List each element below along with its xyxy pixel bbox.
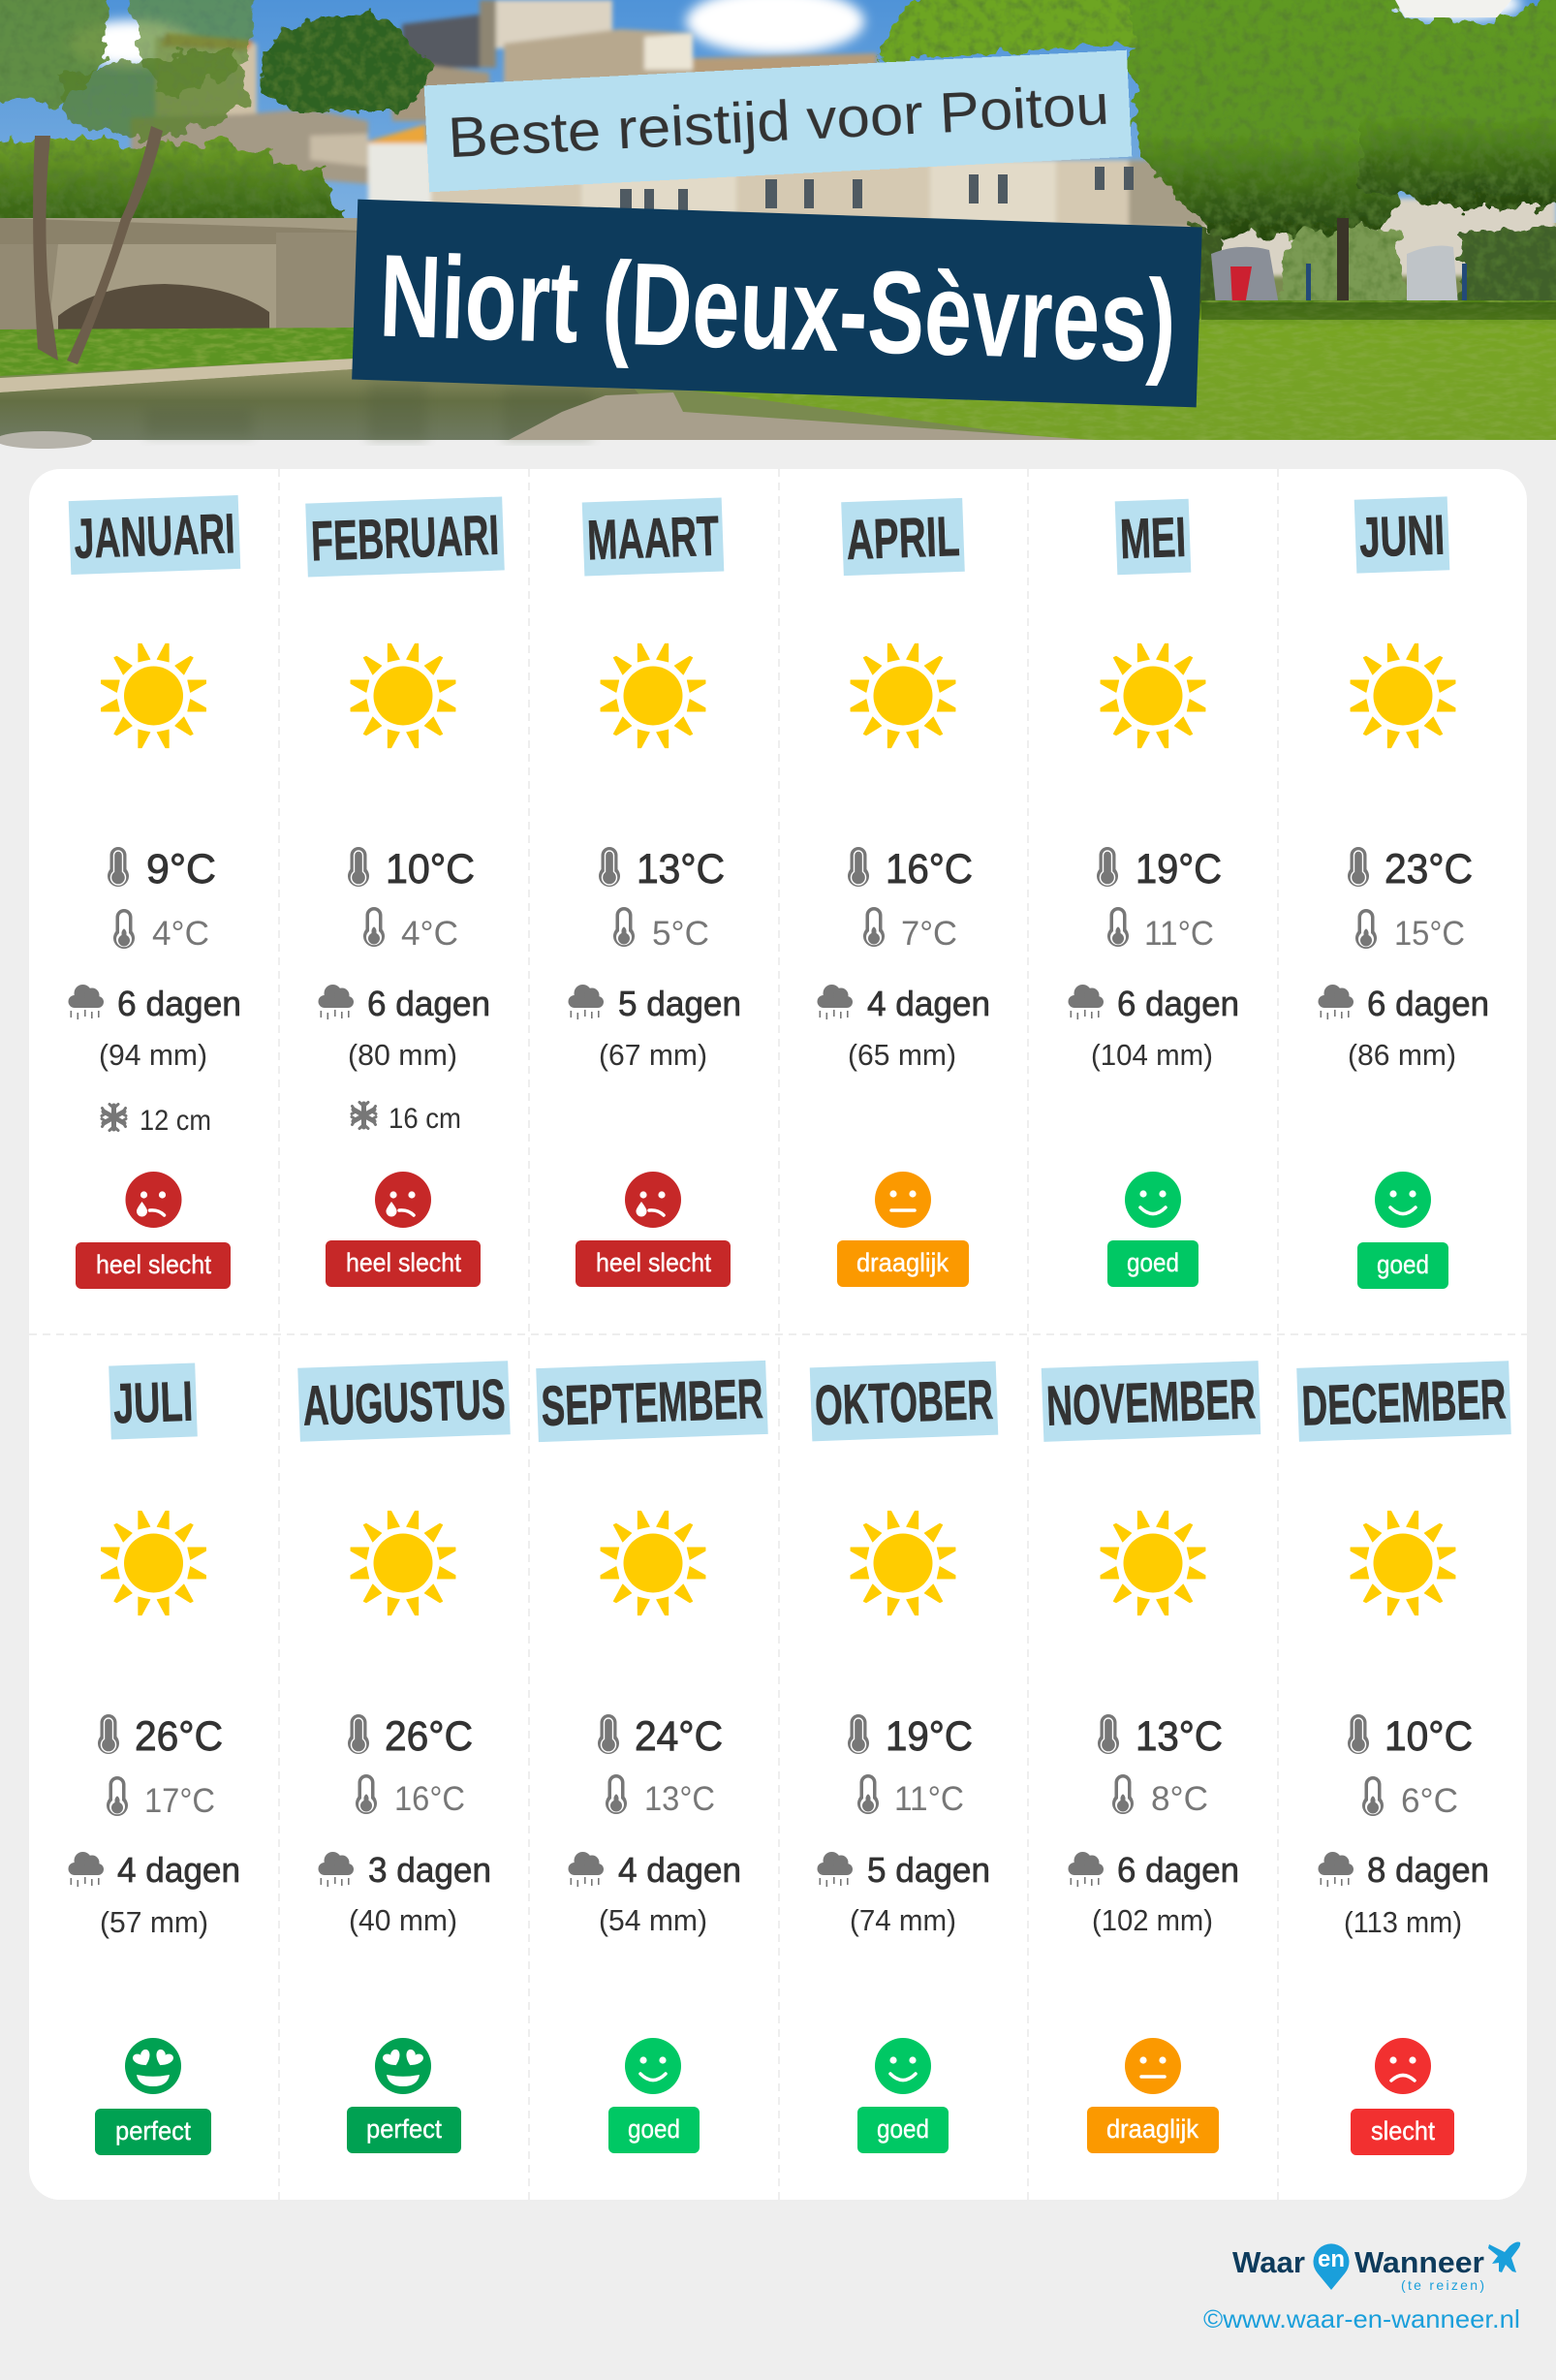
icon: thermometer low [613,907,635,947]
rating badge: draaglijk [1106,2114,1198,2144]
max temperature: 26°C [135,1713,223,1760]
rainfall: (65 mm) [848,1038,956,1072]
icon: sun [601,1511,705,1615]
header photo: Niort riverside [0,0,1556,449]
icon: thermometer high [1348,1714,1369,1754]
panel: oktober [810,1362,998,2153]
rating badge: draaglijk [856,1248,949,1277]
icon: thermometer low [363,907,385,947]
rain days: 6 dagen [117,984,241,1023]
month heading [297,1361,511,1442]
copyright url: ©www.waar-en-wanneer.nl [1203,2304,1520,2333]
month heading: JULI [112,1370,194,1435]
month heading [536,1361,768,1442]
rating badge [1107,1240,1198,1287]
icon: thermometer high [1098,1714,1119,1754]
max temperature: 24°C [635,1713,723,1760]
month heading: APRIL [845,505,961,572]
snowfall: 16 cm [389,1103,461,1135]
icon: airplane [1488,2242,1520,2272]
month heading [109,1362,198,1440]
max temperature: 23°C [1385,846,1473,892]
rating badge: slecht [1371,2116,1435,2145]
rain days: 4 dagen [618,1850,741,1890]
icon: thermometer low [863,907,885,947]
icon: rain cloud [318,985,354,1019]
logo: Waar en Wanneer: Waar [1232,2245,1305,2279]
rating badge: perfect [366,2114,442,2144]
icon: thermometer high [598,1714,619,1754]
icon: map pin [1314,2243,1349,2290]
icon: rain cloud [68,985,104,1019]
rain days: 4 dagen [867,984,990,1023]
icon: map pin: en [1318,2246,1345,2272]
logo: Waar en Wanneer: (te reizen) [1401,2277,1484,2293]
month heading: SEPTEMBER [540,1367,764,1438]
rating badge [1087,2107,1219,2153]
month heading: MEI [1119,506,1187,571]
icon: sun [601,643,705,748]
max temperature: 10°C [386,846,475,892]
panel: juli [68,1362,240,2155]
icon: thermometer high [1097,847,1118,887]
max temperature: 13°C [637,846,725,892]
icon: smiling face [875,2038,931,2094]
icon: neutral face [1125,2038,1181,2094]
min temperature: 4°C [401,915,458,953]
month heading [1115,499,1191,575]
snowfall: 12 cm [140,1105,211,1137]
icon: sun [1101,643,1205,748]
rainfall: (57 mm) [100,1905,208,1939]
icon: sun [1351,1511,1455,1615]
rating badge: heel slecht [96,1250,211,1279]
icon: sun [101,1511,205,1615]
rating badge [857,2107,949,2153]
rating badge: heel slecht [346,1248,461,1277]
rain days: 5 dagen [867,1850,990,1890]
month heading [305,496,505,578]
icon: rain cloud [1318,985,1354,1019]
min temperature: 13°C [644,1780,715,1818]
icon: thermometer low [857,1774,879,1814]
icon: rain cloud [1068,1852,1104,1887]
max temperature: 16°C [886,846,973,892]
icon: smiling face [1125,1172,1181,1228]
rainfall: (86 mm) [1348,1038,1456,1072]
panel: monthly climate card [29,469,1527,2200]
title: Niort (Deux-Sèvres): Niort (Deux-Sèvres) [378,229,1178,388]
banner: Beste reistijd voor Poitou [424,50,1132,192]
icon: thermometer low [356,1774,377,1814]
month heading: AUGUSTUS [301,1367,507,1438]
rain days: 8 dagen [1367,1850,1489,1890]
max temperature: 13°C [1136,1713,1223,1760]
rainfall: (94 mm) [99,1038,207,1072]
rain days: 5 dagen [618,984,741,1023]
icon: thermometer low [1107,907,1129,947]
month heading: NOVEMBER [1045,1367,1257,1438]
icon: sun [1351,643,1455,748]
icon: snowflake [102,1105,126,1130]
min temperature: 15°C [1394,915,1465,953]
icon: thermometer low [1362,1776,1384,1816]
rainfall: (113 mm) [1344,1905,1462,1939]
max temperature: 9°C [146,846,216,892]
min temperature: 5°C [652,915,709,953]
panel: maart [568,498,741,1287]
icon: crying face [625,1172,681,1228]
icon: neutral face [875,1172,931,1228]
panel: september [536,1361,768,2153]
rating badge [95,2109,211,2155]
month heading [810,1362,998,1441]
icon: rain cloud [1318,1852,1354,1887]
rainfall: (54 mm) [599,1903,707,1937]
min temperature: 16°C [394,1780,465,1818]
rating badge: goed [628,2114,680,2144]
icon: crying face [126,1172,182,1228]
min temperature: 11°C [1144,915,1214,953]
min temperature: 6°C [1401,1782,1458,1820]
rain days: 3 dagen [368,1850,491,1890]
icon: rain cloud [818,1852,853,1887]
icon: thermometer low [1112,1774,1134,1814]
icon: sun [851,643,955,748]
rating badge [608,2107,700,2153]
icon: smiling face [1375,1172,1431,1228]
rainfall: (104 mm) [1091,1038,1213,1072]
max temperature: 26°C [385,1713,473,1760]
rating badge [1351,2109,1454,2155]
icon: thermometer high [98,1714,119,1754]
icon: thermometer low [606,1774,627,1814]
panel: april [818,498,990,1287]
rainfall: (102 mm) [1092,1903,1213,1937]
icon: sad face [1375,2038,1431,2094]
month heading: OKTOBER [814,1368,994,1437]
logo: Waar en Wanneer: Wanneer [1354,2245,1484,2279]
icon: thermometer high [848,847,869,887]
title: Niort (Deux-Sèvres) [352,200,1202,407]
icon: thermometer high [348,847,369,887]
banner: Beste reistijd voor Poitou: Beste reistijd voor Poitou [447,74,1110,170]
rating badge: goed [1127,1248,1179,1277]
month heading: FEBRUARI [310,504,500,573]
icon: rain cloud [1068,985,1104,1019]
rating badge: perfect [115,2116,191,2145]
icon: heart-eyes face [375,2038,431,2094]
rain days: 6 dagen [1367,984,1489,1023]
icon: rain cloud [568,985,604,1019]
icon: thermometer high [848,1714,869,1754]
icon: crying face [375,1172,431,1228]
rating badge [326,1240,481,1287]
month heading [582,498,724,576]
month heading [69,495,240,575]
rain days: 4 dagen [117,1850,240,1890]
panel: januari [68,495,241,1289]
icon: sun [351,1511,455,1615]
max temperature: 19°C [886,1713,973,1760]
min temperature: 11°C [894,1780,964,1818]
rain days: 6 dagen [1117,1850,1239,1890]
icon: smiling face [625,2038,681,2094]
month heading: JUNI [1358,503,1446,570]
icon: thermometer low [1355,909,1377,949]
icon: heart-eyes face [125,2038,181,2094]
icon: sun [351,643,455,748]
rain days: 6 dagen [367,984,490,1023]
month heading: MAART [586,505,720,572]
month heading [1042,1361,1260,1442]
icon: thermometer low [107,1776,128,1816]
rating badge: goed [1377,1250,1429,1279]
icon: sun [101,643,205,748]
icon: thermometer high [599,847,620,887]
panel: juni [1318,496,1489,1289]
rating badge: goed [877,2114,929,2144]
rating badge [347,2107,461,2153]
panel: november [1042,1361,1260,2153]
month heading [1354,496,1449,574]
max temperature: 19°C [1136,846,1222,892]
logo: Waar en Wanneer [1232,2242,1520,2293]
icon: thermometer high [1348,847,1369,887]
min temperature: 8°C [1151,1780,1208,1818]
rainfall: (67 mm) [599,1038,707,1072]
rating badge [1357,1242,1448,1289]
icon: snowflake [352,1103,376,1128]
icon: sun [1101,1511,1205,1615]
rainfall: (74 mm) [850,1903,956,1937]
rainfall: (40 mm) [349,1903,457,1937]
rainfall: (80 mm) [348,1038,457,1072]
panel: augustus [297,1361,511,2153]
icon: thermometer high [108,847,129,887]
panel: februari [305,496,505,1287]
rating badge [576,1240,731,1287]
rating badge [837,1240,969,1287]
icon: sun [851,1511,955,1615]
icon: thermometer high [348,1714,369,1754]
icon: rain cloud [68,1852,104,1887]
month heading: JANUARI [73,502,236,571]
min temperature: 4°C [152,915,209,953]
panel: december [1296,1361,1511,2155]
icon: rain cloud [568,1852,604,1887]
rating badge [76,1242,231,1289]
icon: rain cloud [818,985,853,1019]
panel: mei [1068,499,1239,1287]
rain days: 6 dagen [1117,984,1239,1023]
max temperature: 10°C [1385,1713,1473,1760]
month heading [841,498,965,576]
rating badge: heel slecht [596,1248,711,1277]
icon: thermometer low [113,909,135,949]
icon: rain cloud [318,1852,354,1887]
min temperature: 7°C [901,915,957,953]
min temperature: 17°C [144,1782,215,1820]
